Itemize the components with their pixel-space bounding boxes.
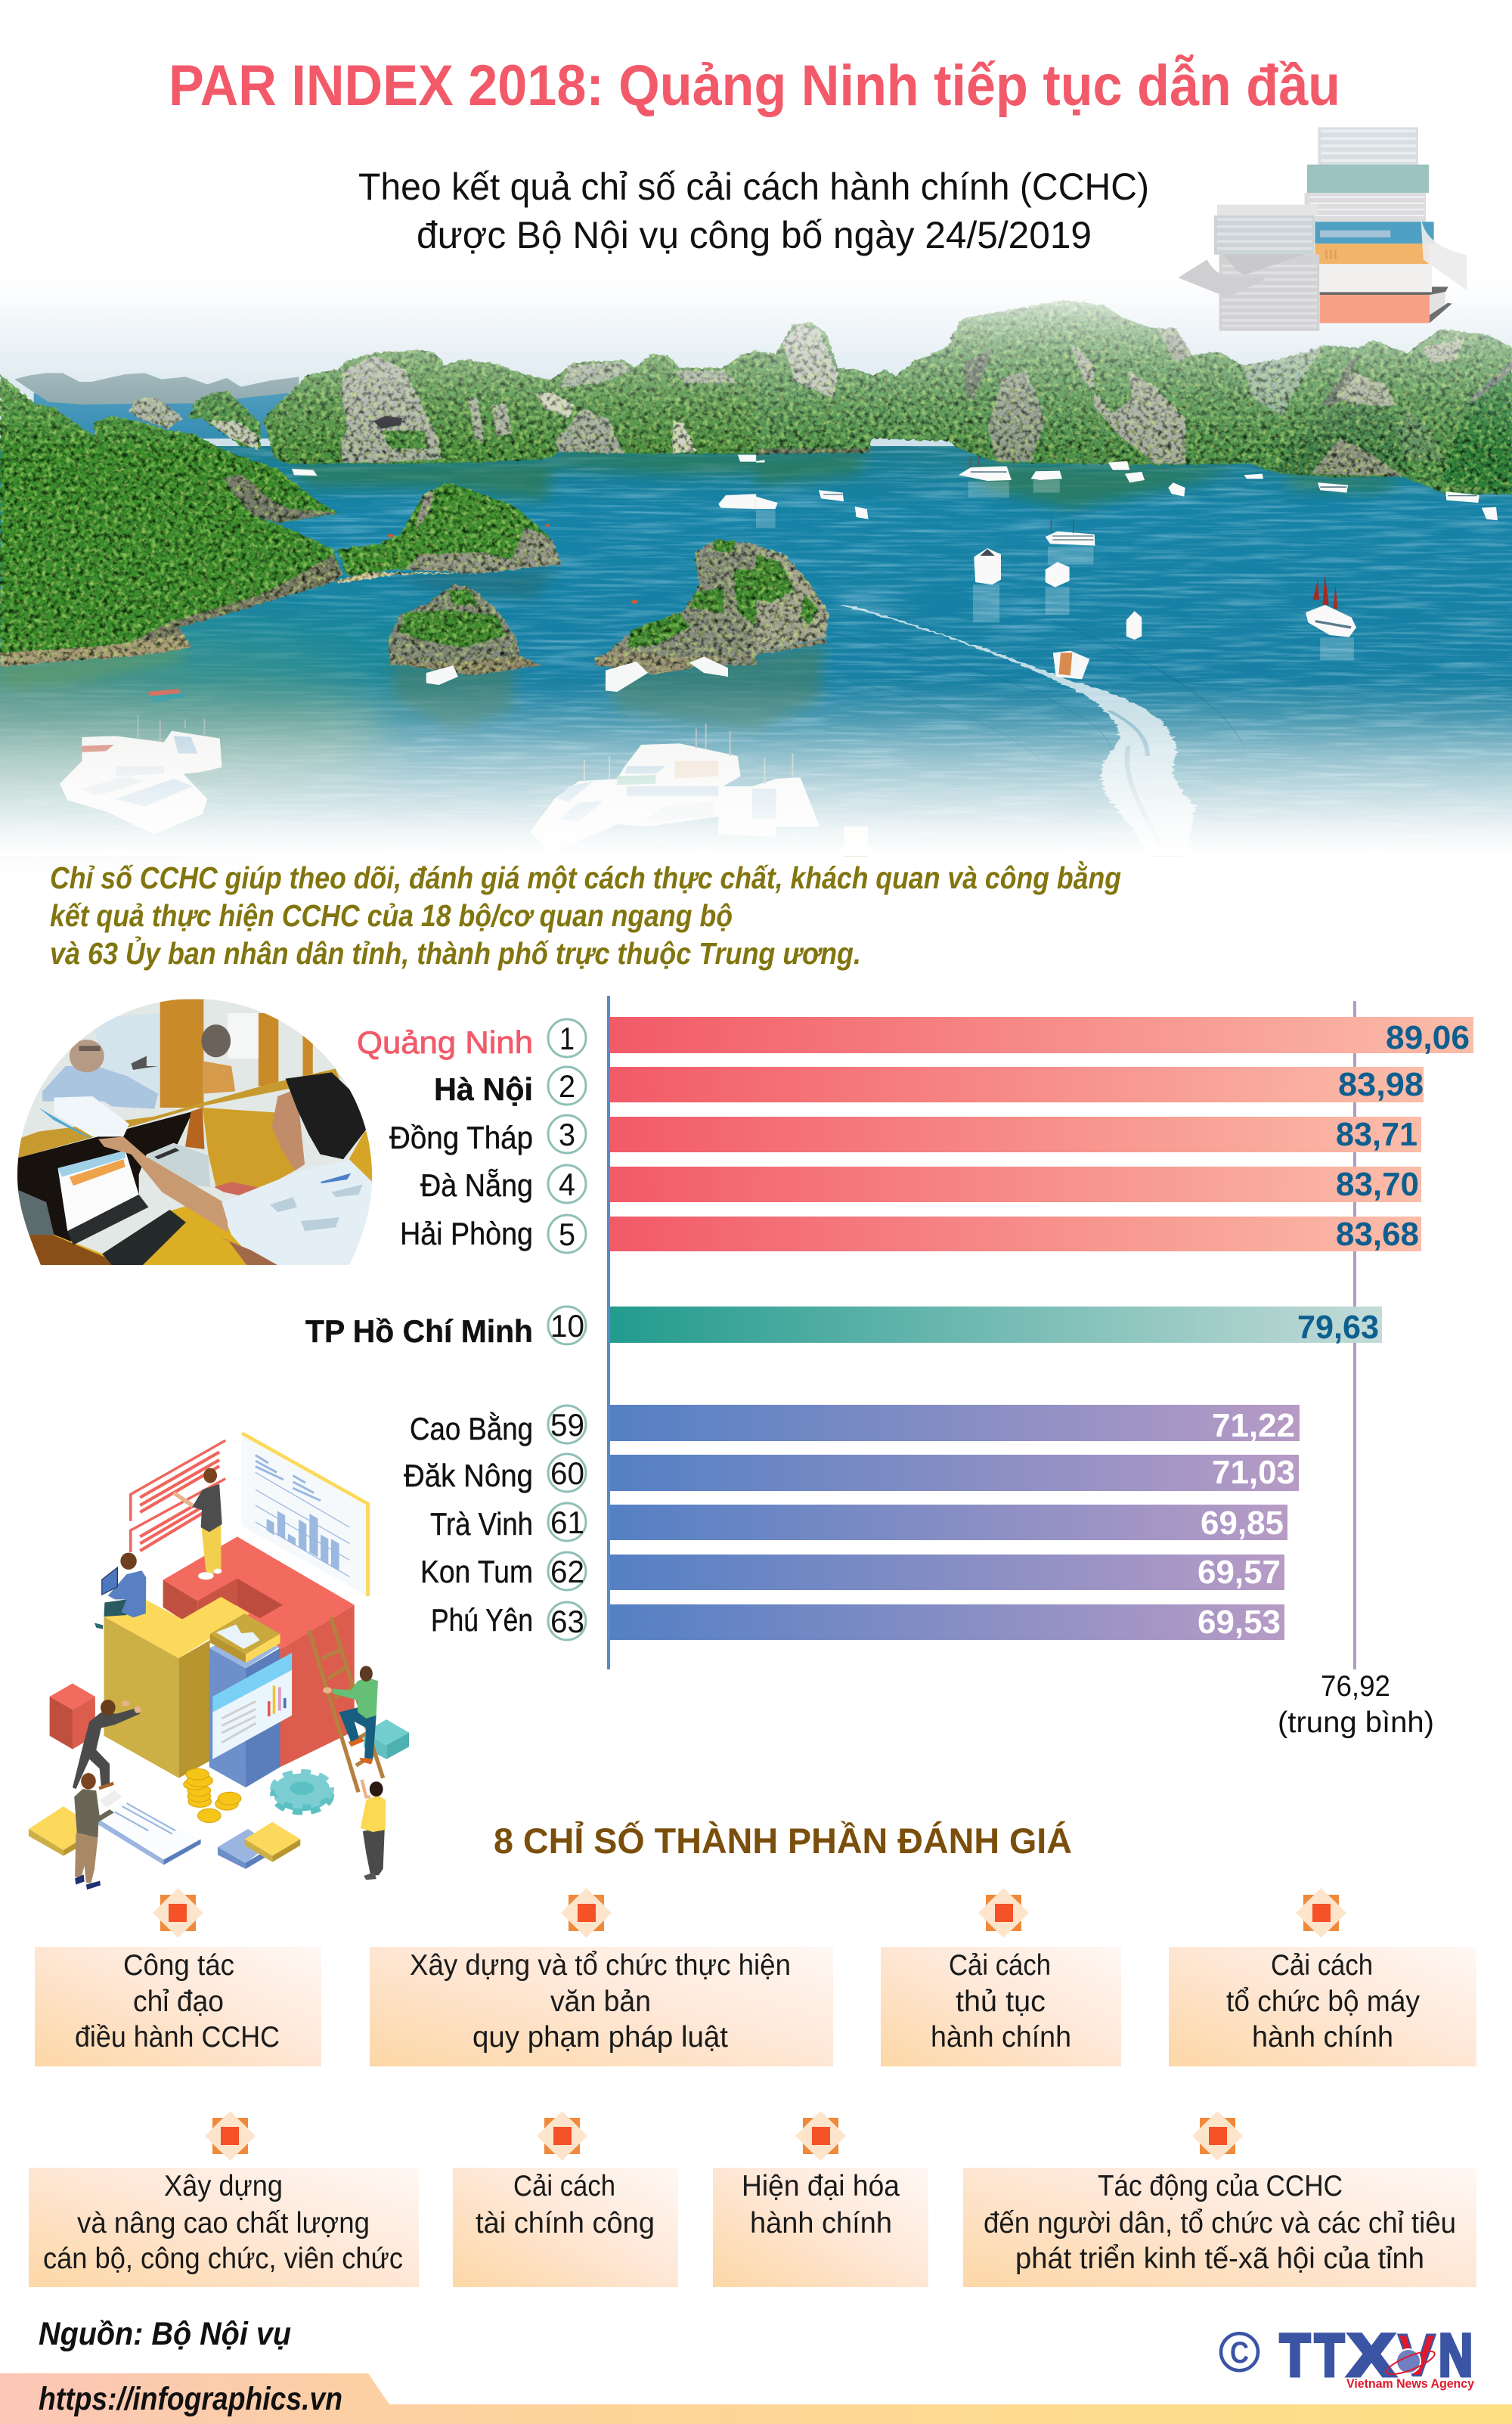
bar row: Phú Yên: 63: [550, 1604, 584, 1639]
panel: Xây dựng và tổ chức thực hiện văn bản: [370, 1888, 833, 2066]
yellow block: [104, 1597, 249, 1778]
bar row: Đồng Tháp: [389, 1115, 1421, 1155]
person: climbing ladder: [323, 1666, 378, 1764]
bar row: Đăk Nông: Đăk Nông: [404, 1458, 533, 1493]
panel: Cải cách thủ tục hành chính: hành chính: [931, 2021, 1071, 2054]
title: PAR INDEX 2018: Quảng Ninh tiếp tục dẫn đầu: [169, 54, 1340, 118]
bar row: Đồng Tháp: Đồng Tháp: [389, 1120, 533, 1155]
icon: diamond marker: [978, 1888, 1029, 1938]
icon: diamond marker: [1296, 1888, 1346, 1938]
panel: Công tác chỉ đạo điều hành CCHC: điều hành CCHC: [75, 2021, 280, 2054]
bar row: Đăk Nông: 71,03: [1212, 1454, 1295, 1491]
panel: Cải cách tổ chức bộ máy hành chính: tổ chức bộ máy: [1226, 1985, 1420, 2018]
bar row: Cao Bằng: 59: [550, 1407, 584, 1443]
bar row: Hà Nội: Hà Nội: [434, 1071, 533, 1107]
coins: [184, 1768, 241, 1823]
chart: vertical axis: [607, 996, 610, 1669]
panel: Cải cách tổ chức bộ máy hành chính: Cải cách: [1271, 1949, 1373, 1982]
panel: Hiện đại hóa hành chính: Hiện đại hóa: [742, 2170, 900, 2202]
bar row: TP Hồ Chí Minh: TP Hồ Chí Minh: [305, 1313, 533, 1349]
panel: Cải cách thủ tục hành chính: thủ tục: [956, 1985, 1046, 2018]
bar row: Phú Yên: [431, 1602, 1284, 1641]
icon: diamond marker: [561, 1888, 612, 1938]
source: Nguồn: Bộ Nội vụ: [39, 2316, 291, 2352]
bar row: TP Hồ Chí Minh: 79,63: [1297, 1309, 1379, 1346]
logo: TTXVN: C: [1230, 2336, 1249, 2370]
panel: Tác động của CCHC: phát triển kinh tế-xã hội của tỉnh: [1015, 2243, 1424, 2275]
person: pushing block: [73, 1700, 141, 1790]
average label: [1278, 1670, 1434, 1739]
image tile: [210, 1613, 280, 1663]
photo: Ha Long Bay: [0, 272, 1512, 857]
bar row: Kon Tum: 62: [550, 1554, 584, 1589]
panel: Xây dựng và tổ chức thực hiện văn bản: văn bản: [550, 1985, 651, 2018]
bar row: Đà Nẵng: 4: [559, 1167, 575, 1202]
person: holding paper: [74, 1773, 122, 1889]
section heading: 8 CHỈ SỐ THÀNH PHẦN ĐÁNH GIÁ: [494, 1821, 1072, 1861]
panel: Xây dựng và nâng cao chất lượng cán bộ: cán bộ, công chức, viên chức: [43, 2243, 403, 2275]
panel: Cải cách thủ tục hành chính: [881, 1888, 1121, 2066]
illustration: isometric teamwork: [29, 1434, 409, 1889]
logo: TTXVN: N: [1439, 2321, 1473, 2388]
cave: [373, 416, 402, 429]
person: standing at boards: [174, 1468, 222, 1579]
bar row: Đồng Tháp: 83,71: [1336, 1116, 1418, 1153]
bar row: Kon Tum: Kon Tum: [420, 1554, 533, 1589]
panel: Tác động của CCHC: [963, 2111, 1476, 2287]
bar row: Kon Tum: 69,57: [1198, 1554, 1281, 1591]
islands and mountains: [0, 300, 1512, 675]
logo: TTXVN: [1221, 2321, 1475, 2391]
bar row: Đà Nẵng: Đà Nẵng: [420, 1167, 533, 1203]
bar row: Quảng Ninh: 89,06: [1386, 1019, 1470, 1056]
bar row: Đồng Tháp: 3: [559, 1117, 575, 1152]
bar row: Trà Vinh: 69,85: [1201, 1505, 1284, 1542]
bar row: Kon Tum: [420, 1552, 1284, 1591]
bar row: Quảng Ninh: [357, 1017, 1473, 1060]
bar row: TP Hồ Chí Minh: [305, 1307, 1382, 1349]
panel: Tác động của CCHC: Tác động của CCHC: [1098, 2170, 1343, 2202]
panel: Hiện đại hóa hành chính: hành chính: [750, 2207, 892, 2240]
average label: 76,92: [1321, 1670, 1390, 1703]
bar row: Hải Phòng: Hải Phòng: [400, 1216, 533, 1251]
ladder: [308, 1617, 383, 1792]
bar row: Hải Phòng: [400, 1215, 1421, 1253]
footer band: [0, 2373, 1512, 2424]
bar row: Đà Nẵng: [420, 1165, 1421, 1203]
chart: average reference line: [1353, 1001, 1356, 1669]
panel: Công tác chỉ đạo điều hành CCHC: [35, 1888, 321, 2066]
icon: diamond marker: [205, 2111, 256, 2161]
panel: Tác động của CCHC: đến người dân, tổ chức và các chỉ tiêu: [984, 2207, 1456, 2240]
bar row: Đà Nẵng: 83,70: [1336, 1166, 1419, 1203]
bar row: Cao Bằng: Cao Bằng: [410, 1411, 533, 1446]
bar row: TP Hồ Chí Minh: 10: [550, 1308, 584, 1344]
logo: TTXVN: X: [1348, 2321, 1395, 2388]
panel: Xây dựng và tổ chức thực hiện văn bản: quy phạm pháp luật: [472, 2021, 728, 2054]
panel: Cải cách thủ tục hành chính: Cải cách: [949, 1949, 1051, 1982]
bar row: Trà Vinh: Trà Vinh: [430, 1506, 533, 1542]
panel: Hiện đại hóa hành chính: [713, 2111, 928, 2287]
logo: TTXVN: Vietnam News Agency: [1346, 2376, 1475, 2391]
panel: Cải cách tổ chức bộ máy hành chính: [1169, 1888, 1476, 2066]
subtitle: được Bộ Nội vụ công bố ngày 24/5/2019: [417, 214, 1092, 256]
logo: TTXVN: T: [1280, 2321, 1310, 2388]
blue block: [209, 1643, 280, 1787]
intro text: kết quả thực hiện CCHC của 18 bộ/cơ quan ngang bộ: [50, 898, 733, 933]
icon: diamond marker: [1192, 2111, 1243, 2161]
panel: Cải cách tổ chức bộ máy hành chính: hành chính: [1252, 2021, 1393, 2054]
panel: Cải cách tài chính công: Cải cách: [513, 2170, 615, 2202]
red text board: [131, 1440, 225, 1552]
person: with laptop: [94, 1553, 146, 1629]
bar row: Cao Bằng: [410, 1405, 1300, 1446]
bar row: Hải Phòng: 83,68: [1336, 1216, 1419, 1253]
icon: diamond marker: [537, 2111, 587, 2161]
panel: Xây dựng và nâng cao chất lượng cán bộ: [29, 2111, 419, 2287]
reflections: [0, 454, 1402, 731]
bar row: Trà Vinh: 61: [550, 1505, 584, 1540]
small cubes: [50, 1683, 409, 1759]
bar row: Cao Bằng: 71,22: [1212, 1407, 1295, 1444]
bar row: Hà Nội: 83,98: [1338, 1066, 1424, 1103]
intro text: Chỉ số CCHC giúp theo dõi, đánh giá một cách thực chất, khách quan và công bằng: [50, 860, 1121, 895]
panel: Xây dựng và nâng cao chất lượng cán bộ: Xây dựng: [164, 2170, 283, 2202]
panel: Cải cách tài chính công: tài chính công: [476, 2207, 655, 2240]
illustration: office service counter: [17, 999, 372, 1265]
bar row: Đăk Nông: [404, 1454, 1299, 1493]
floor tiles and document: [29, 1802, 300, 1869]
bar row: Quảng Ninh: Quảng Ninh: [357, 1024, 533, 1060]
person: woman with ladder: [361, 1780, 386, 1880]
bottom boat clusters: [60, 731, 820, 853]
bar row: Phú Yên: Phú Yên: [431, 1602, 533, 1638]
bar row: Trà Vinh: [430, 1503, 1287, 1542]
wake: [829, 605, 1244, 857]
intro text: và 63 Ủy ban nhân dân tỉnh, thành phố trực thuộc Trung ương.: [50, 936, 861, 971]
panel: Công tác chỉ đạo điều hành CCHC: chỉ đạo: [133, 1985, 224, 2018]
subtitle: [358, 166, 1149, 256]
logo: TTXVN: V: [1398, 2321, 1436, 2388]
icon: diamond marker: [795, 2111, 846, 2161]
red block: [163, 1536, 355, 1767]
chart board: [241, 1434, 368, 1596]
panel: Xây dựng và tổ chức thực hiện văn bản: Xây dựng và tổ chức thực hiện: [410, 1949, 791, 1982]
bar row: Hà Nội: [434, 1066, 1424, 1107]
panel: Công tác chỉ đạo điều hành CCHC: Công tác: [123, 1949, 234, 1982]
bar row: Đăk Nông: 60: [550, 1455, 584, 1491]
logo: TTXVN: T: [1315, 2321, 1344, 2388]
boats: [756, 456, 1498, 660]
website link: https://infographics.vn: [39, 2381, 342, 2417]
panel: Xây dựng và nâng cao chất lượng cán bộ: và nâng cao chất lượng: [77, 2207, 370, 2240]
intro text: [50, 860, 1121, 971]
report screen: [212, 1653, 292, 1759]
bar row: Hải Phòng: 5: [559, 1217, 575, 1252]
gear: [274, 1773, 330, 1811]
panel: Cải cách tài chính công: [453, 2111, 678, 2287]
subtitle: Theo kết quả chỉ số cải cách hành chính (CCHC): [358, 166, 1149, 208]
bar row: Quảng Ninh: 1: [559, 1021, 575, 1056]
icon: stack of books and papers: [1178, 127, 1467, 331]
bar row: Hà Nội: 2: [559, 1068, 575, 1104]
bar row: Phú Yên: 69,53: [1198, 1604, 1281, 1641]
icon: diamond marker: [153, 1888, 203, 1938]
average label: (trung bình): [1278, 1706, 1434, 1739]
